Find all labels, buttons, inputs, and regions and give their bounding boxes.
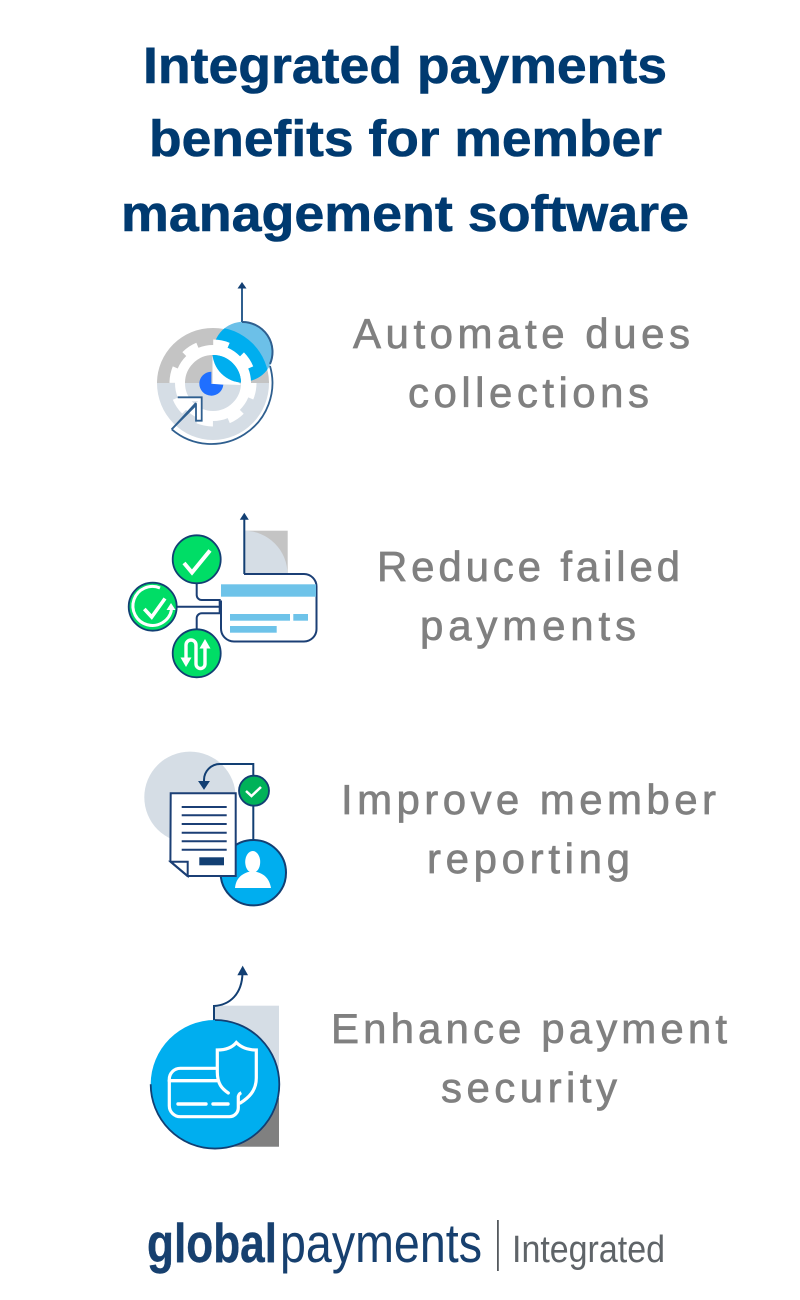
text: reduce failed payments: payments xyxy=(420,602,636,649)
text: reduce failed payments: Reduce failed xyxy=(377,543,680,590)
logo: global payments integrated xyxy=(147,1212,665,1274)
icon: failed payments card xyxy=(129,513,316,677)
icon: automate gear xyxy=(157,282,274,444)
icon: payment security shield xyxy=(151,967,279,1149)
text: automate dues collections xyxy=(353,310,690,416)
text: enhance payment security: Enhance payment xyxy=(331,1005,727,1052)
logo: global payments integrated: global xyxy=(147,1212,277,1274)
title: Integrated payments xyxy=(143,37,667,94)
text: reduce failed payments xyxy=(377,543,680,649)
icon: member report xyxy=(144,752,286,905)
text: improve member reporting: Improve member xyxy=(341,776,716,823)
title: benefits for member xyxy=(149,110,662,167)
text: improve member reporting: reporting xyxy=(427,835,630,882)
title xyxy=(121,37,689,242)
logo: global payments integrated: payments xyxy=(280,1212,482,1274)
title: management software xyxy=(121,185,689,242)
text: enhance payment security xyxy=(331,1005,727,1111)
logo: global payments integrated: Integrated xyxy=(512,1229,665,1271)
text: automate dues collections: Automate dues xyxy=(353,310,690,357)
text: automate dues collections: collections xyxy=(408,369,649,416)
text: improve member reporting xyxy=(341,776,716,882)
text: enhance payment security: security xyxy=(441,1064,617,1111)
